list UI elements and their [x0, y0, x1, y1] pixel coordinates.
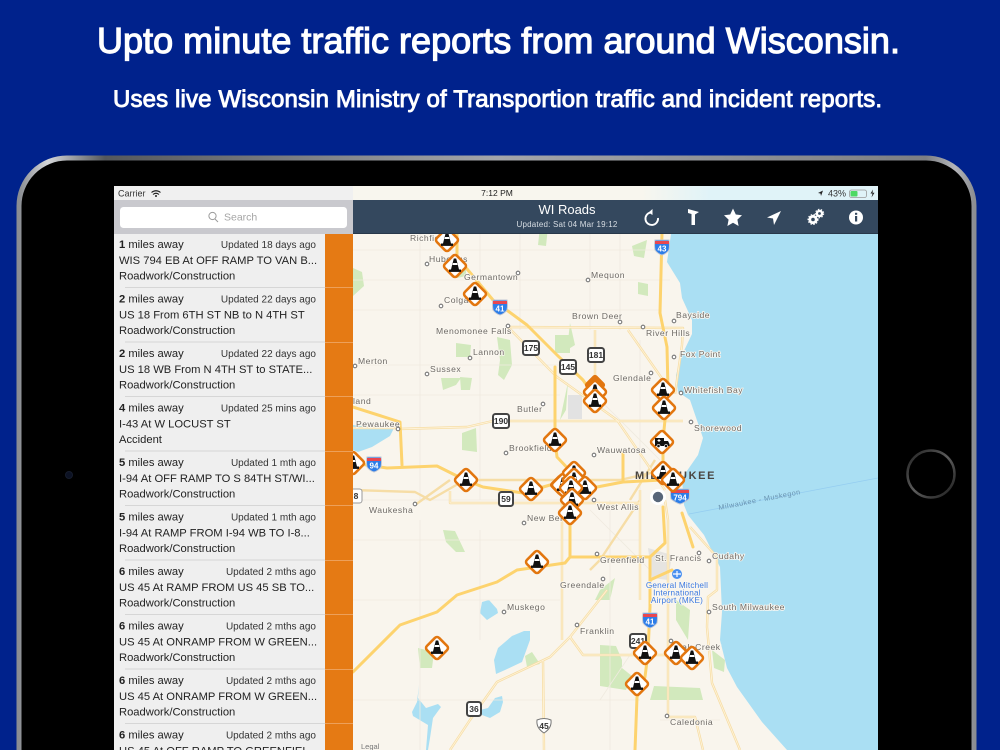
list row 4: 4 miles away [119, 402, 184, 414]
place labels: Franklin [580, 626, 615, 636]
place labels: Bayside [676, 310, 710, 320]
place labels: Lannon [473, 347, 505, 357]
list row 8: Roadwork/Construction [119, 652, 235, 664]
list row 2: US 18 From 6TH ST NB to N 4TH ST [119, 310, 305, 322]
list panel [114, 186, 353, 750]
icon: star [724, 208, 742, 226]
highway shields: 794 [673, 494, 687, 502]
icon: settings gears [808, 209, 824, 224]
status bar right text [482, 190, 874, 198]
icon: road sign flag [688, 209, 699, 225]
place labels: Caledonia [670, 717, 713, 727]
airport label: General Mitchell [646, 581, 708, 590]
list row 1: Roadwork/Construction [119, 270, 235, 282]
list row 3 [119, 348, 316, 392]
status carrier [118, 190, 161, 197]
list row 9 [119, 675, 317, 718]
list row 9: US 45 At ONRAMP FROM W GREEN... [119, 691, 317, 703]
place labels: land [353, 396, 371, 406]
list row 1: 1 miles away [119, 239, 184, 251]
highway shields: 41 [646, 618, 655, 626]
list row 6: 5 miles away [119, 512, 184, 524]
list row 7: 6 miles away [119, 566, 184, 578]
incident markers [341, 228, 704, 696]
list row 10: 6 miles away [119, 730, 184, 742]
icon: front camera [66, 472, 72, 478]
place labels: Menomonee Falls [436, 326, 512, 336]
highway shields [350, 240, 690, 733]
icon: info [849, 210, 863, 224]
list row 10 [119, 730, 318, 750]
list row 3: Updated 22 days ago [221, 349, 316, 360]
list row 2: Roadwork/Construction [119, 325, 235, 337]
list row 6 [119, 512, 316, 555]
lake michigan [667, 200, 878, 750]
minor streets [353, 234, 720, 750]
place labels: Richfield [410, 233, 447, 243]
place labels: New Berlin [527, 513, 574, 523]
list row 1: Updated 18 days ago [221, 240, 316, 251]
place labels: Mequon [591, 270, 625, 280]
list row 1 [119, 239, 317, 282]
list row 6: Updated 1 mth ago [231, 512, 316, 524]
list row 7 [119, 566, 316, 610]
nav title: WI Roads [538, 202, 596, 217]
highway shields: 94 [370, 462, 379, 470]
list row 3: US 18 WB From N 4TH ST to STATE... [119, 364, 312, 376]
icon: home button [908, 450, 954, 498]
airport label: Airport (MKE) [651, 596, 703, 605]
place labels: Brown Deer [572, 311, 622, 321]
place labels: Butler [517, 404, 542, 414]
airport label [646, 569, 708, 605]
place labels: Sussex [430, 364, 461, 374]
navigation bar [353, 200, 878, 234]
shipping lane [689, 478, 878, 514]
highway shields: 59 [501, 494, 511, 504]
list row 9: Roadwork/Construction [119, 706, 235, 718]
shipping lane: Milwaukee - Muskegon [718, 487, 801, 512]
list row 2: Updated 22 days ago [221, 294, 316, 306]
status carrier: Carrier [118, 188, 146, 198]
place labels: Merton [358, 356, 388, 366]
place labels: Shorewood [694, 423, 742, 433]
place labels: Colgate [444, 295, 477, 305]
list row 7: Roadwork/Construction [119, 598, 235, 610]
place labels: Oak Creek [675, 642, 721, 652]
orange sidebar strip [325, 234, 353, 750]
place labels: Waukesha [369, 505, 413, 515]
airport label: International [653, 588, 701, 598]
place labels: Hubertus [429, 254, 468, 264]
status bar right [353, 186, 878, 200]
search bar: Search [224, 212, 257, 224]
roads secondary [353, 327, 740, 750]
status bar right text: 43% [828, 188, 846, 198]
list row 4: I-43 At W LOCUST ST [119, 418, 231, 430]
place labels: St. Francis [655, 553, 702, 563]
place labels: Brookfield [509, 443, 552, 453]
place labels: Germantown [464, 272, 518, 282]
list row 7: US 45 At RAMP FROM US 45 SB TO... [119, 582, 314, 594]
list row 7: Updated 2 mths ago [226, 567, 316, 578]
place labels: Whitefish Bay [684, 385, 743, 395]
list row 3: 2 miles away [119, 348, 184, 360]
place labels: Greenfield [600, 555, 645, 565]
roads major highways [353, 233, 693, 750]
place labels: MILWAUKEE [635, 470, 716, 482]
place labels: West Allis [597, 502, 639, 512]
marker: accident ambulance [650, 430, 674, 454]
map panel [341, 186, 878, 750]
list row 1: WIS 794 EB At OFF RAMP TO VAN B... [119, 255, 317, 267]
icon: location arrow [767, 211, 781, 225]
place labels: Muskego [507, 602, 545, 612]
highway shields: 45 [539, 721, 549, 731]
place labels [353, 233, 785, 750]
tablet device [19, 158, 974, 750]
place labels: Cudahy [712, 551, 745, 561]
highway shields: 145 [561, 362, 575, 372]
list row 2: 2 miles away [119, 294, 184, 306]
title: Upto minute traffic reports from around Wisconsin. [97, 20, 900, 61]
highway shields: 181 [589, 350, 603, 360]
list row 6: Roadwork/Construction [119, 543, 235, 555]
inland lakes and parks [353, 227, 725, 750]
place labels: Greendale [560, 580, 605, 590]
highway shields: 241 [631, 636, 645, 646]
highway shields: 190 [494, 416, 508, 426]
list row 9: 6 miles away [119, 675, 184, 687]
list row 5: I-94 At OFF RAMP TO S 84TH ST/WI... [119, 473, 315, 485]
list row 8 [119, 620, 317, 664]
list row 2 [119, 294, 316, 337]
search bar [120, 207, 347, 228]
status bar right text: 7:12 PM [481, 188, 513, 198]
subtitle: Uses live Wisconsin Ministry of Transportion traffic and incident reports. [113, 86, 882, 113]
icon: refresh [645, 209, 658, 225]
list row 5: Updated 1 mth ago [231, 458, 316, 469]
list row 8: Updated 2 mths ago [226, 622, 316, 632]
place labels: Pewaukee [356, 419, 400, 429]
current location dot [650, 489, 666, 505]
list row 10: Updated 2 mths ago [226, 730, 316, 742]
place labels: Fox Point [680, 349, 721, 359]
list row 6: I-94 At RAMP FROM I-94 WB TO I-8... [119, 528, 310, 540]
highway shields: 41 [496, 304, 505, 314]
list row 8: US 45 At ONRAMP FROM W GREEN... [119, 636, 317, 648]
highway shields: 43 [658, 244, 667, 254]
list row 4: Accident [119, 434, 163, 446]
highway shields: 175 [524, 343, 538, 353]
place labels: Wauwatosa [597, 445, 646, 455]
list row 9: Updated 2 mths ago [226, 676, 316, 687]
highway shields: 36 [469, 704, 479, 714]
list row 5: Roadwork/Construction [119, 488, 235, 500]
list row 4: Updated 25 mins ago [221, 404, 316, 414]
list row 8: 6 miles away [119, 620, 184, 632]
list row 3: Roadwork/Construction [119, 380, 235, 392]
highway shields: 8 [354, 491, 359, 501]
list row 5 [119, 457, 316, 500]
list row 4 [119, 402, 316, 446]
place labels: River Hills [646, 328, 690, 338]
place labels: South Milwaukee [712, 602, 785, 612]
nav updated time: Updated: Sat 04 Mar 19:12 [516, 220, 618, 229]
row separators [125, 288, 325, 724]
list row 5: 5 miles away [119, 457, 184, 469]
place labels: Glendale [613, 373, 651, 383]
